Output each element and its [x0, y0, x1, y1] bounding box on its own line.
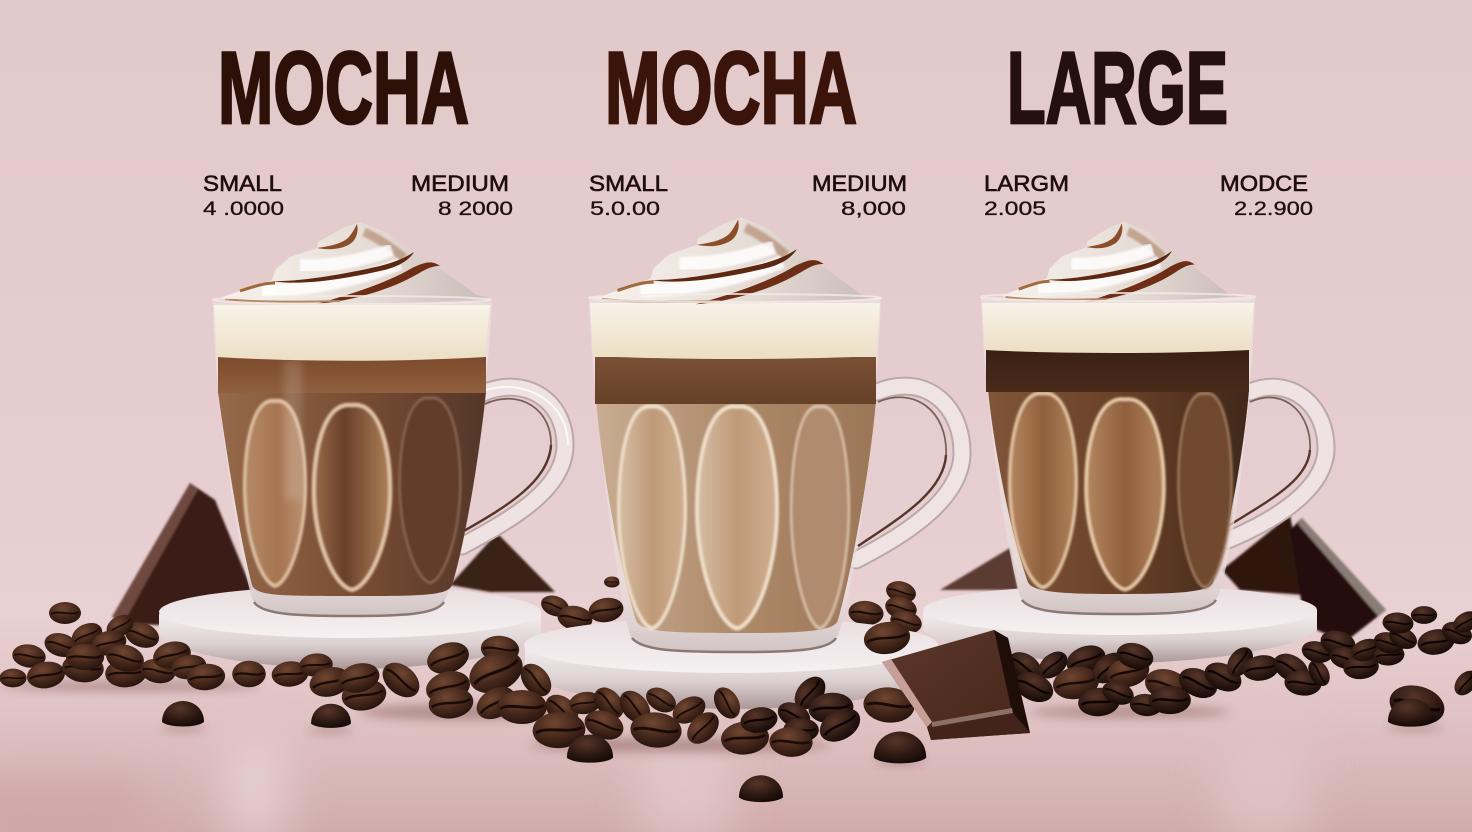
- cup: right: [981, 222, 1326, 614]
- plate: right: [923, 585, 1317, 663]
- glass base: [1022, 600, 1216, 614]
- price block: first mocha: 4 .0000: [203, 199, 284, 220]
- cup: center: [589, 217, 962, 652]
- coffee layers: [590, 303, 880, 633]
- price block: large: LARGM: [984, 171, 1069, 196]
- coffee beans: loose: [162, 666, 1472, 802]
- price block: second mocha: MEDIUM: [812, 171, 907, 196]
- price block: large: MODCE: [1220, 171, 1308, 196]
- cup handle: [1228, 387, 1326, 540]
- foam swirl: [1001, 222, 1239, 302]
- price block: second mocha: 8,000: [841, 199, 906, 220]
- price block: first mocha: SMALL: [203, 171, 282, 196]
- floor reflections: [0, 740, 1310, 832]
- glass base: [632, 638, 836, 652]
- title: LARGE: LARGE: [1007, 31, 1228, 145]
- plate: left: [159, 586, 541, 669]
- price block: first mocha: MEDIUM: [411, 171, 509, 196]
- plate: center: [524, 617, 938, 709]
- cup: left: [213, 222, 568, 616]
- bean shadows: [0, 681, 1443, 764]
- beans behind plates: [49, 576, 924, 652]
- coffee beans: center front: [738, 619, 916, 758]
- glass rim: [589, 294, 881, 302]
- coffee beans: left pile: [0, 618, 770, 757]
- cup handle: [856, 386, 962, 560]
- price block: large: 2.005: [984, 199, 1046, 220]
- glass body: [589, 297, 881, 652]
- title: MOCHA center: MOCHA: [605, 31, 857, 145]
- coffee layers: [982, 303, 1254, 594]
- price block: second mocha: [589, 171, 907, 220]
- glass rim: [213, 296, 491, 304]
- foam swirl: [597, 217, 875, 304]
- chocolate piece: front: [882, 630, 1030, 740]
- coffee beans: right pile: [1003, 606, 1472, 718]
- glass base: [254, 602, 444, 616]
- price block: large: 2.2.900: [1234, 199, 1313, 220]
- chocolate pieces behind cups: [112, 483, 1386, 642]
- price block: second mocha: 5.0.00: [590, 199, 660, 220]
- price block: second mocha: SMALL: [589, 171, 668, 196]
- coffee layers: [214, 305, 490, 596]
- cup handle: [462, 387, 568, 546]
- glass body: [981, 297, 1255, 614]
- price block: large: [984, 171, 1313, 220]
- price block: first mocha: 8 2000: [438, 199, 513, 220]
- price block: first mocha: [203, 171, 513, 220]
- glass body: [213, 303, 492, 616]
- title: MOCHA: MOCHA: [218, 31, 469, 145]
- glass rim: [981, 293, 1255, 301]
- foam swirl: [220, 222, 490, 304]
